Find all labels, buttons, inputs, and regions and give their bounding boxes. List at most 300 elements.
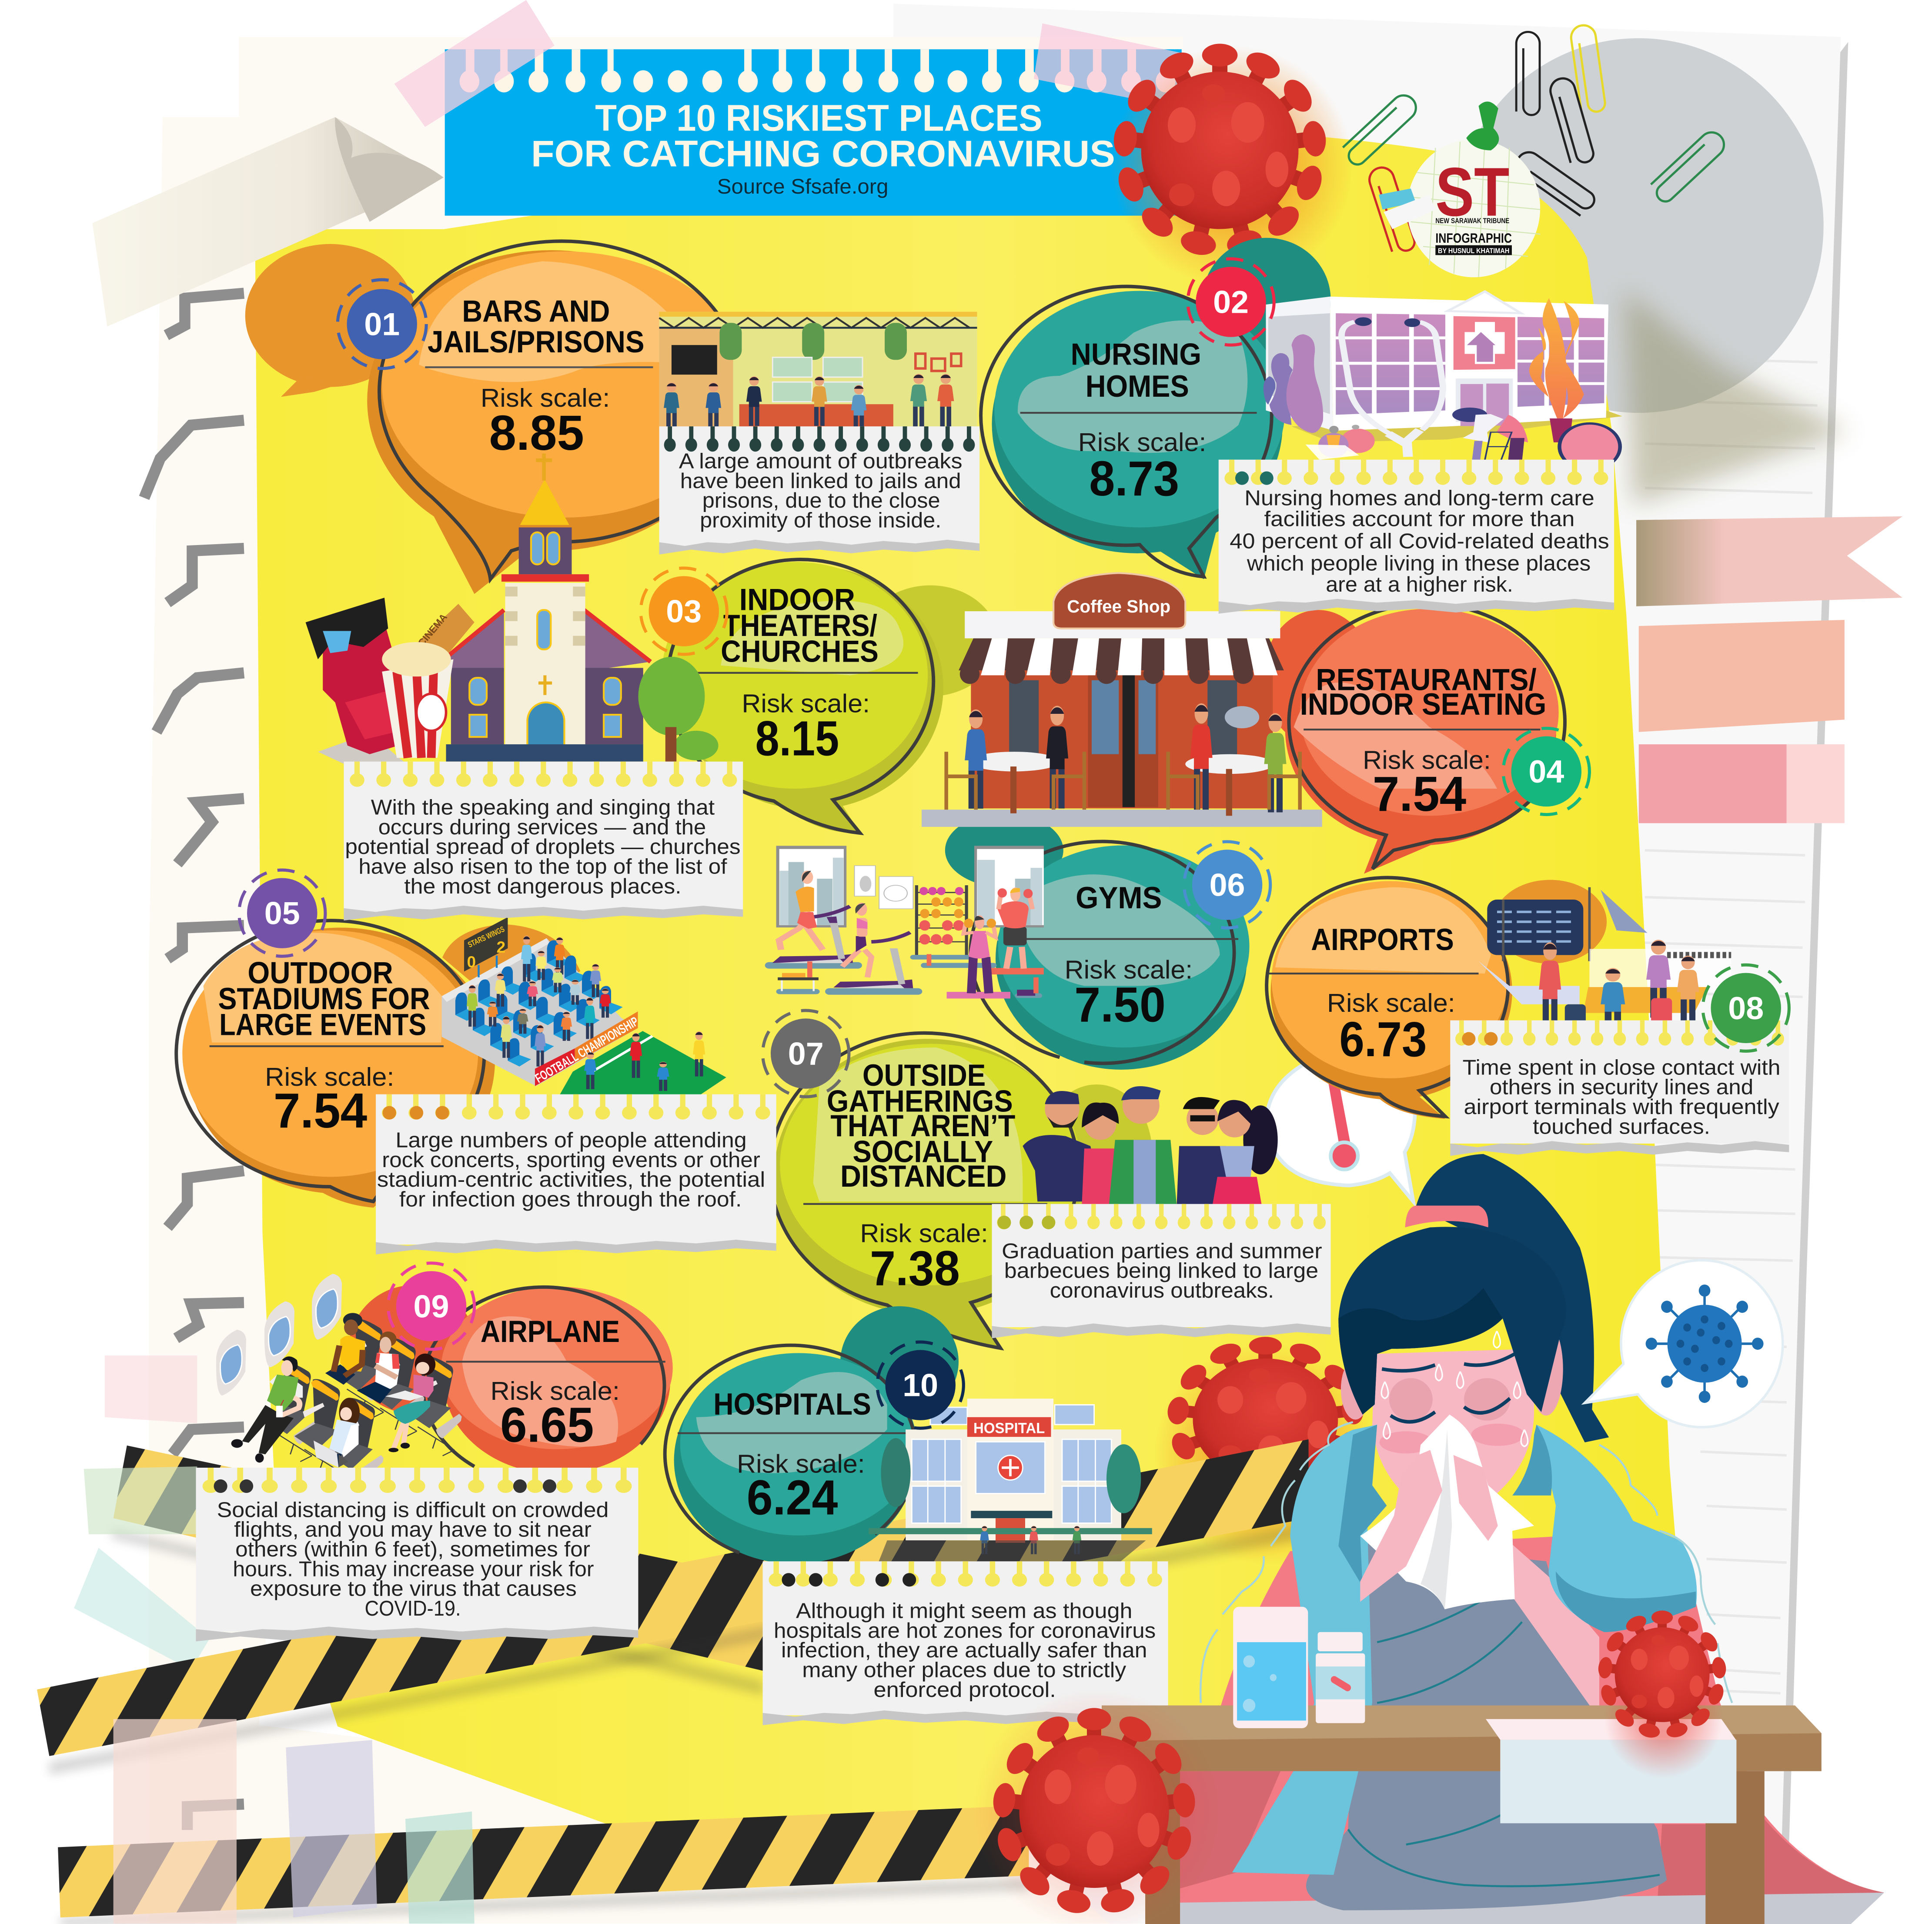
- dark holes: [782, 1573, 916, 1586]
- friend five: [1213, 1100, 1278, 1205]
- illustration: church: [306, 454, 719, 770]
- back bubble: [245, 244, 415, 397]
- back bubble: [862, 586, 998, 696]
- note text: which people living in these places: [1247, 551, 1591, 576]
- risk label: Risk scale:: [1065, 955, 1193, 984]
- heading: INDOOR: [739, 582, 855, 617]
- note text: hospitals are hot zones for coronavirus: [774, 1618, 1156, 1643]
- bubble body: [444, 1287, 670, 1474]
- note: bars: [659, 426, 979, 555]
- bubble body: [774, 1039, 1082, 1348]
- bubble 09 airplane: [349, 1285, 673, 1474]
- number badge: 01: [364, 306, 400, 342]
- number badge 03: [641, 568, 727, 654]
- peach ribbon: [1639, 620, 1845, 732]
- heading: BARS AND: [462, 294, 610, 328]
- heading: RESTAURANTS/: [1316, 663, 1537, 697]
- number badge 08: 08: [1728, 990, 1764, 1026]
- note: gatherings: [992, 1204, 1331, 1338]
- bubble outline: [1267, 877, 1508, 1117]
- source: Source Sfsafe.org: [717, 175, 889, 198]
- title banner: [445, 49, 1182, 216]
- number badge 08: [1703, 965, 1789, 1051]
- gym window left: [776, 846, 846, 927]
- speech bubble with blue virus: [1585, 1260, 1783, 1427]
- bubble highlight: [1275, 887, 1491, 974]
- eyes: [1380, 1354, 1524, 1453]
- heading line 3: THAT AREN’T: [830, 1109, 1015, 1143]
- bubble 01 bars and jails: [245, 241, 747, 594]
- passenger laptop: [314, 1398, 360, 1488]
- friend three: [1109, 1086, 1177, 1205]
- runner man: [779, 870, 823, 950]
- note text: facilities account for more than: [1264, 507, 1574, 531]
- illustration: sick woman: [1102, 1154, 1884, 1924]
- heading line 3: CHURCHES: [721, 634, 879, 669]
- dumbbell rack: [910, 885, 996, 968]
- illustration: coffee shop: [922, 573, 1322, 827]
- dark holes: [214, 1479, 556, 1493]
- risk value: 8.73: [1089, 451, 1179, 506]
- caution tape main: [37, 1439, 1309, 1774]
- heading line 2: JAILS/PRISONS: [428, 325, 645, 359]
- pink ribbon flag: [1636, 516, 1902, 606]
- number badge: [1184, 842, 1270, 928]
- note text: the most dangerous places.: [404, 874, 682, 898]
- bubble 10 hospitals: [665, 1306, 959, 1564]
- friend four: [1177, 1097, 1228, 1205]
- heading line 2: HOMES: [1086, 369, 1189, 404]
- scoreboard away score: 2: [497, 938, 505, 956]
- tissue shade: [1421, 1430, 1452, 1609]
- note text: proximity of those inside.: [700, 508, 941, 532]
- note text: [679, 449, 963, 532]
- yellow note paper: [255, 123, 1691, 1824]
- bubble highlight: [813, 1047, 1023, 1201]
- virus behind tape: [1154, 1337, 1376, 1565]
- shop sign: [1053, 573, 1185, 629]
- note text: coronavirus outbreaks.: [1050, 1278, 1274, 1302]
- bubble body: [1271, 883, 1512, 1119]
- note text: many other places due to strictly: [802, 1658, 1126, 1682]
- passenger green vest: [231, 1356, 303, 1462]
- paperclips: [1340, 24, 1729, 255]
- note text: hours. This may increase your risk for: [233, 1556, 594, 1581]
- risk value: 6.73: [1339, 1012, 1427, 1067]
- risk value: 8.85: [489, 405, 584, 461]
- blanket shading: [1174, 1771, 1884, 1905]
- note text: [1002, 1238, 1322, 1302]
- front row seats: [265, 1362, 348, 1478]
- back bubble: [1203, 238, 1331, 361]
- coloured holes: [383, 1106, 449, 1120]
- note paper cast shadow: [1624, 290, 1848, 505]
- plants: [1263, 334, 1323, 433]
- logo ST: ST: [1435, 153, 1509, 231]
- number badge: [763, 1011, 849, 1097]
- note text: potential spread of droplets — churches: [345, 834, 741, 859]
- bubble outline: [1289, 604, 1565, 869]
- logo byline: BY HUSNUL KHATIMAH: [1438, 247, 1509, 255]
- runner woman: [842, 903, 871, 977]
- back row seats: [337, 1319, 462, 1456]
- note text: barbecues being linked to large: [1004, 1258, 1318, 1283]
- fever squiggles: [1200, 1422, 1732, 1703]
- treadmill one: [765, 906, 862, 969]
- translucent tapes bottom left: [114, 1719, 475, 1924]
- note text: prisons, due to the close: [702, 488, 940, 512]
- bubble light: [662, 562, 928, 789]
- main virus: [1111, 44, 1353, 287]
- risk label: Risk scale:: [1327, 988, 1455, 1017]
- bubble body: [1285, 614, 1556, 874]
- cream paper left: [149, 37, 1183, 1924]
- bubble highlight: [721, 601, 903, 675]
- heading line 2: GATHERINGS: [827, 1084, 1013, 1118]
- note text: flights, and you may have to sit near: [234, 1517, 592, 1542]
- pastel tapes left: [74, 1355, 210, 1670]
- heading: AIRPLANE: [481, 1315, 620, 1349]
- risk label: Risk scale:: [737, 1449, 865, 1478]
- note text: rock concerts, sporting events or other: [382, 1148, 760, 1172]
- bubble outline: [379, 241, 744, 579]
- note text: enforced protocol.: [874, 1677, 1056, 1702]
- caution tape bottom: [58, 1805, 1029, 1924]
- note text: airport terminals with frequently: [1464, 1094, 1779, 1119]
- note text: are at a higher risk.: [1326, 572, 1513, 596]
- treadmill two: [825, 932, 922, 995]
- illustration: hospital: [869, 1399, 1152, 1571]
- heading line 2: STADIUMS FOR: [218, 982, 430, 1016]
- hospital sign: HOSPITAL: [973, 1420, 1045, 1437]
- table: [1102, 1705, 1822, 1924]
- heading line 4: SOCIALLY: [852, 1134, 993, 1169]
- note text: have been linked to jails and: [680, 468, 961, 493]
- scarf right shade: [1512, 1425, 1696, 1632]
- number badge 10: 10: [902, 1367, 938, 1403]
- bubble light: [998, 845, 1250, 1047]
- note text: [345, 795, 741, 898]
- bubble 04 restaurants: [1263, 604, 1589, 874]
- number badge 09: 09: [414, 1288, 449, 1324]
- note text: Social distancing is difficult on crowded: [217, 1497, 608, 1522]
- bubble 07 outside gatherings: [763, 1011, 1152, 1348]
- number badge: [239, 870, 325, 956]
- pink washi tape left: [394, 0, 555, 127]
- gym window right: [974, 846, 1044, 927]
- title text: TOP 10 RISKIEST PLACES: [595, 97, 1043, 139]
- bubble highlight: [462, 1316, 618, 1447]
- title spiral holes: [460, 49, 1176, 92]
- bubble 08 airports: [1267, 877, 1607, 1119]
- curled tape top left: [92, 117, 444, 327]
- note text: COVID-19.: [365, 1596, 461, 1620]
- grey circle paper: [1454, 38, 1824, 413]
- back bubble: [349, 1285, 477, 1413]
- tissue box: [1486, 1719, 1736, 1823]
- windows: [216, 1274, 342, 1395]
- rose ribbon: [1639, 744, 1845, 823]
- stethoscope: [1341, 317, 1443, 457]
- neck and face: [1372, 1349, 1534, 1511]
- heading line 3: LARGE EVENTS: [219, 1008, 426, 1042]
- water glass: [1233, 1607, 1308, 1728]
- heading line 2: THEATERS/: [723, 609, 877, 643]
- virus on tissue box: [1597, 1610, 1727, 1778]
- note text: others (within 6 feet), sometimes for: [235, 1537, 590, 1561]
- heading: GYMS: [1076, 881, 1162, 915]
- note text: 40 percent of all Covid-related deaths: [1230, 529, 1609, 553]
- shop sign: Coffee Shop: [1067, 596, 1170, 616]
- tissue: [1360, 1415, 1534, 1609]
- bubble 05 outdoor stadiums: [176, 870, 580, 1208]
- bubble body: [677, 565, 943, 833]
- illustration: gym: [765, 846, 1044, 998]
- dress: [1306, 1541, 1667, 1910]
- caution tape upper left: [111, 1446, 764, 1696]
- risk label: Risk scale:: [265, 1062, 394, 1091]
- note text: occurs during services — and the: [378, 815, 706, 839]
- illustration: stadium: [442, 917, 726, 1109]
- note text: [1463, 1055, 1781, 1138]
- bubble highlight: [203, 933, 444, 1043]
- bubble light: [182, 930, 478, 1177]
- note text: [774, 1599, 1156, 1702]
- note text: Large numbers of people attending: [395, 1128, 747, 1152]
- note: hospitals: [763, 1561, 1168, 1725]
- note text: Time spent in close contact with: [1463, 1055, 1781, 1079]
- friend two: [1082, 1102, 1127, 1205]
- risk value: 7.54: [274, 1083, 367, 1138]
- risk label: Risk scale:: [1078, 428, 1206, 457]
- passenger white shirt: [357, 1332, 400, 1404]
- orange holes: [1462, 1032, 1497, 1046]
- number badge: [338, 280, 426, 368]
- back bubble: [1493, 880, 1607, 964]
- sweat drops: [1381, 1331, 1528, 1446]
- number badge 02: 02: [1213, 284, 1249, 320]
- bubble highlight: [696, 1372, 887, 1473]
- risk label: Risk scale:: [860, 1219, 988, 1248]
- bubble outline: [970, 841, 1234, 1063]
- heading: NURSING: [1071, 338, 1201, 372]
- title text line 2: FOR CATCHING CORONAVIRUS: [531, 133, 1115, 174]
- bubble outline: [423, 1287, 664, 1466]
- scoreboard names: STARS WINGS: [466, 924, 506, 949]
- bubble body: [674, 1357, 916, 1564]
- heading: OUTSIDE: [862, 1058, 986, 1093]
- bubble light: [1300, 609, 1559, 816]
- stand and pitch: [442, 917, 726, 1109]
- pediment: [1447, 291, 1521, 313]
- door: [1456, 378, 1513, 426]
- bubble outline: [981, 287, 1272, 577]
- heading line 5: DISTANCED: [840, 1159, 1006, 1194]
- heading: OUTDOOR: [247, 956, 393, 990]
- building: [1330, 297, 1608, 431]
- note text: [377, 1128, 765, 1211]
- bubble highlight: [1294, 683, 1497, 789]
- risk value: 7.50: [1074, 977, 1166, 1032]
- blanket: [1174, 1531, 1884, 1905]
- pill bottle: [1316, 1632, 1365, 1723]
- bubble 06 gyms: [945, 813, 1270, 1070]
- pink washi tape right: [1034, 23, 1188, 108]
- seated elders: [1306, 425, 1375, 460]
- illustration: nursing home: [1263, 291, 1622, 470]
- illustration: bar scene: [659, 312, 977, 435]
- bubble body: [992, 294, 1283, 579]
- ears: [1341, 1322, 1563, 1419]
- scoreboard home score: 0: [467, 953, 476, 971]
- bubble light: [441, 1287, 673, 1449]
- note text: [217, 1497, 608, 1620]
- note text: have also risen to the top of the list of: [358, 854, 727, 879]
- bubble light: [1272, 881, 1508, 1078]
- bench: [776, 961, 820, 994]
- risk value: 6.24: [747, 1470, 838, 1526]
- note text: touched surfaces.: [1533, 1114, 1710, 1138]
- dark holes: [1235, 472, 1274, 485]
- note text: stadium-centric activities, the potential: [377, 1167, 765, 1191]
- risk value: 7.38: [870, 1241, 960, 1296]
- note text: [1230, 485, 1609, 596]
- bubble light: [680, 1353, 917, 1536]
- note text: others in security lines and: [1490, 1075, 1753, 1099]
- number badge: 06: [1210, 867, 1245, 903]
- flame plant: [1529, 298, 1584, 418]
- bubble outline: [770, 1033, 1078, 1348]
- number badge 09: [388, 1263, 475, 1349]
- illustration: friends group: [1023, 1086, 1278, 1205]
- note: airplane: [196, 1468, 638, 1641]
- green pin: [1466, 102, 1499, 151]
- illustration: thermometer bubble: [1267, 1047, 1415, 1201]
- note text: for infection goes through the roof.: [399, 1187, 742, 1211]
- note: airports: [1450, 1021, 1789, 1156]
- scarf left: [1232, 1425, 1377, 1875]
- ground shadow: [1291, 410, 1622, 442]
- logo tagline: NEW SARAWAK TRIBUNE: [1435, 217, 1509, 225]
- bubble highlight: [1016, 874, 1220, 986]
- bubble light: [382, 251, 747, 518]
- bubble body: [187, 927, 495, 1208]
- note: churches: [344, 762, 743, 920]
- gym posters: [855, 866, 913, 909]
- note text: A large amount of outbreaks: [679, 449, 963, 473]
- exercising woman: [963, 915, 996, 993]
- olive holes: [997, 1216, 1055, 1229]
- bottom floor band: [1174, 1893, 1884, 1924]
- bubble 03 theaters and churches: [662, 559, 998, 833]
- bubble outline: [665, 1345, 916, 1553]
- scarf left shade: [1338, 1425, 1387, 1586]
- note text: Graduation parties and summer: [1002, 1238, 1322, 1263]
- banner text: FOOTBALL CHAMPIONSHIP: [533, 1014, 641, 1086]
- back bubble: [1263, 610, 1374, 746]
- risk label: Risk scale:: [1363, 746, 1491, 775]
- number badge 02: [1188, 259, 1274, 345]
- dumbbell: [1015, 977, 1042, 998]
- note text: With the speaking and singing that: [371, 795, 715, 820]
- note text: Nursing homes and long-term care: [1244, 485, 1594, 510]
- round pink device: [1559, 423, 1620, 470]
- front hair: [1338, 1227, 1566, 1415]
- risk value: 6.65: [500, 1397, 594, 1452]
- bubble 02 nursing homes: [981, 238, 1331, 579]
- note text: infection, they are actually safer than: [781, 1638, 1147, 1662]
- torn paper notches: [144, 293, 244, 1830]
- ponytail: [1416, 1154, 1609, 1442]
- scarf right: [1537, 1425, 1697, 1632]
- front hair dark: [1338, 1288, 1503, 1415]
- heading: HOSPITALS: [713, 1387, 871, 1422]
- laptop seat: [329, 1398, 384, 1497]
- virus near table: [973, 1688, 1220, 1924]
- friend one: [1023, 1091, 1103, 1201]
- flower pot: [1550, 418, 1572, 442]
- logo infographic: INFOGRAPHIC: [1435, 231, 1512, 246]
- number badge 10: [877, 1342, 963, 1428]
- risk label: Risk scale:: [481, 383, 610, 412]
- bubble body: [996, 848, 1247, 1070]
- bubble body: [367, 250, 734, 594]
- number badge 03: 03: [666, 593, 702, 629]
- windows: [1336, 313, 1604, 415]
- illustration: airport: [1478, 887, 1731, 1039]
- bubble light: [780, 1044, 1080, 1285]
- back bubble: [945, 813, 1063, 887]
- risk label: Risk scale:: [491, 1376, 620, 1405]
- left wing: [1266, 297, 1334, 431]
- illustration: airplane seats: [216, 1274, 462, 1497]
- passenger yellow shirt: [325, 1313, 365, 1385]
- left hand and arm: [1360, 1450, 1442, 1602]
- heading line 2: INDOOR SEATING: [1300, 687, 1546, 722]
- bubble highlight: [1018, 321, 1247, 453]
- risk value: 8.15: [755, 711, 839, 766]
- illustration: church: CINEMA: [416, 611, 449, 648]
- passenger pink shirt: [385, 1354, 435, 1452]
- number badge: [1503, 728, 1589, 815]
- number badge: 04: [1528, 753, 1564, 790]
- back bubble: [442, 924, 580, 1017]
- logo badge: [1379, 102, 1540, 277]
- back paper right: [893, 3, 1848, 1924]
- right hand: [1454, 1455, 1498, 1541]
- tape on logo: [1379, 188, 1435, 229]
- pink sign: [1454, 316, 1515, 370]
- mat: [947, 992, 1010, 998]
- carer and patient: [1452, 408, 1528, 460]
- note text: Although it might seem as though: [796, 1599, 1132, 1623]
- bubble outline: [176, 920, 484, 1201]
- number badge: 07: [788, 1036, 824, 1072]
- risk label: Risk scale:: [742, 689, 870, 718]
- hair band: [1405, 1206, 1488, 1228]
- note: nursing homes: [1219, 460, 1614, 614]
- number badge: 05: [264, 895, 300, 931]
- note text: exposure to the virus that causes: [250, 1576, 577, 1601]
- dress folds: [1348, 1576, 1660, 1886]
- note: stadiums: [376, 1094, 776, 1255]
- back bubble: [840, 1306, 959, 1417]
- exercising man: [990, 887, 1044, 974]
- right forearm: [1464, 1506, 1599, 1705]
- bubble highlight: [419, 261, 705, 382]
- back bubble: [1041, 1084, 1152, 1220]
- heading: AIRPORTS: [1311, 923, 1454, 957]
